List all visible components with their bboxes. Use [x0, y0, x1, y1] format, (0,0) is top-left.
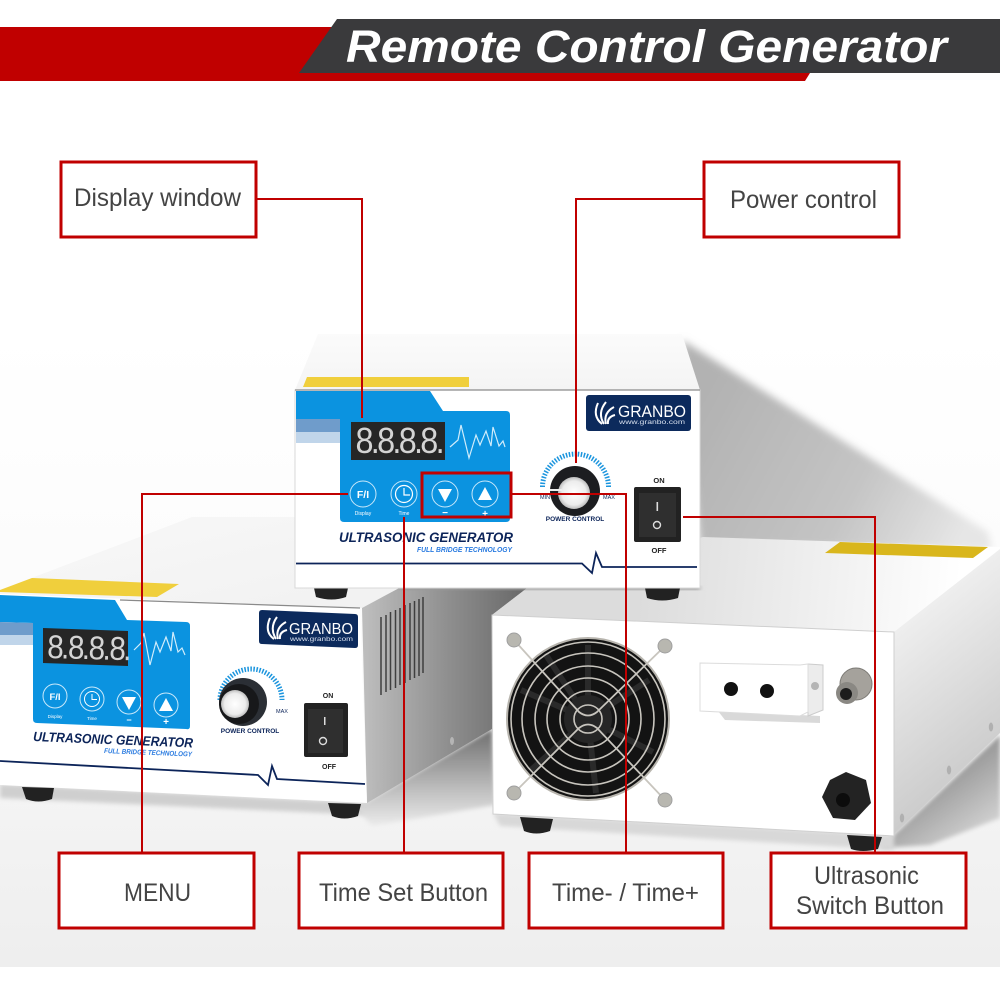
- tagline: FULL BRIDGE TECHNOLOGY: [104, 748, 193, 759]
- logo badge: www.granbo.com: [618, 419, 685, 426]
- yellow warning label: [303, 377, 469, 387]
- top face: [0, 517, 410, 608]
- top trim: [120, 600, 360, 608]
- fan blades: [521, 645, 653, 793]
- yellow warning label: [0, 578, 179, 597]
- button glyphs: Display: [355, 511, 372, 517]
- fan housing: [507, 638, 669, 800]
- button glyphs: Time: [399, 511, 410, 517]
- panel band: [296, 419, 340, 432]
- side vents: [381, 597, 423, 695]
- callout: menu: MENU: [124, 879, 191, 907]
- base line: [296, 553, 697, 573]
- button glyphs: F/I: [49, 692, 61, 703]
- aviation connector: [836, 668, 872, 704]
- left generator: [0, 517, 530, 826]
- logo badge: GRANBO: [618, 403, 686, 421]
- header banner: [0, 19, 1000, 81]
- callout: ultrasonic switch button: [771, 853, 966, 928]
- button glyphs: −: [126, 715, 132, 725]
- cooling fan: [507, 633, 672, 807]
- floor shadow under front: [0, 784, 367, 815]
- power switch: OFF: [322, 764, 337, 771]
- power knob: MAX: [276, 709, 288, 715]
- panel buttons: [350, 481, 498, 507]
- panel buttons: [43, 684, 178, 717]
- dark title plate: [299, 19, 1000, 73]
- title: Remote Control Generator: [346, 21, 949, 72]
- top trim: [295, 389, 700, 391]
- logo badge: GRANBO: [289, 621, 353, 638]
- leader: ultrasonic switch: [683, 517, 875, 853]
- bracket flap: [808, 664, 823, 716]
- power knob: POWER CONTROL: [221, 728, 279, 735]
- callout: power control: [704, 162, 899, 237]
- button glyphs: +: [482, 509, 488, 520]
- guard rings: [511, 642, 665, 796]
- fan screws: [507, 633, 672, 807]
- power switch: [634, 476, 681, 555]
- display digits: 8.8.8.8.: [47, 629, 132, 668]
- leader: power control: [576, 199, 704, 463]
- waveform: [134, 632, 185, 665]
- tagline: FULL BRIDGE TECHNOLOGY: [417, 545, 513, 554]
- panel band light: [296, 432, 340, 443]
- floor shadow under side: [356, 729, 495, 826]
- wall shadow of top unit: [682, 340, 992, 550]
- foot left: [520, 817, 553, 834]
- side face: [893, 549, 1000, 835]
- logo badge: [586, 395, 691, 431]
- logo badge: [259, 610, 358, 648]
- power knob: MIN: [540, 495, 550, 501]
- top face: [295, 334, 700, 390]
- panel band: [0, 622, 33, 635]
- floor shadow under back panel: [493, 813, 894, 850]
- front face: [0, 594, 367, 803]
- power knob: [540, 454, 615, 523]
- back panel: [492, 615, 894, 836]
- studio backdrop: [0, 330, 1000, 967]
- side screw: [377, 782, 381, 790]
- power knob: MAX: [603, 495, 615, 501]
- blue control panel: [0, 595, 190, 729]
- red stripe: [0, 27, 810, 81]
- callout: display window: [61, 162, 256, 237]
- foot right: [645, 588, 680, 600]
- button glyphs: [48, 692, 173, 728]
- waveform: [450, 425, 505, 458]
- product name: ULTRASONIC GENERATOR: [339, 530, 513, 545]
- callout: time minus plus: [529, 853, 723, 928]
- side screw far: [450, 737, 454, 745]
- power knob: [219, 669, 288, 735]
- guard cross: [514, 640, 665, 800]
- power switch: ON: [323, 693, 333, 700]
- display digits: 8.8.8.8.: [356, 421, 445, 461]
- floor shadow: [880, 735, 1000, 848]
- leader: time set: [403, 517, 405, 853]
- yellow warning label: [825, 542, 988, 558]
- button glyphs: Time: [87, 716, 97, 721]
- power switch: [304, 693, 348, 771]
- callout: time set button: [299, 853, 503, 928]
- bracket shadow: [718, 711, 820, 723]
- logo badge: www.granbo.com: [289, 636, 353, 643]
- callout: menu: [59, 853, 254, 928]
- power switch: OFF: [652, 546, 667, 555]
- cable gland: [822, 772, 871, 820]
- foot right: [847, 835, 882, 851]
- top face: [492, 537, 1000, 632]
- button glyphs: [355, 486, 492, 520]
- power switch: ON: [653, 476, 665, 485]
- leader: time minus plus: [511, 494, 626, 853]
- product name: ULTRASONIC GENERATOR: [33, 729, 194, 750]
- rear view generator: [492, 537, 1000, 851]
- front face: [295, 390, 700, 588]
- front generator: [295, 334, 700, 600]
- bracket screw: [811, 682, 819, 690]
- fan hub: [564, 695, 612, 743]
- leader: display window: [256, 199, 362, 418]
- blue control panel: [296, 391, 510, 522]
- foot left: [22, 787, 54, 802]
- base line: [0, 761, 365, 785]
- side face: [362, 586, 530, 803]
- button glyphs: −: [442, 508, 448, 519]
- display window: [351, 422, 445, 460]
- highlight: time buttons: [422, 473, 511, 517]
- foot right: [328, 803, 361, 818]
- button glyphs: F/I: [357, 489, 369, 501]
- side screws: [900, 722, 993, 822]
- callout: power control: Power control: [730, 186, 877, 214]
- shadow on units below: [400, 586, 700, 590]
- panel band light: [0, 635, 33, 645]
- button glyphs: Display: [48, 714, 63, 719]
- callout: time minus plus: Time- / Time+: [552, 879, 699, 907]
- display window: [43, 628, 128, 666]
- button glyphs: +: [163, 717, 169, 728]
- callout: time set button: Time Set Button: [319, 879, 488, 907]
- callout: ultrasonic switch button: Ultrasonic: [814, 862, 919, 890]
- callout: ultrasonic switch button: Switch Button: [796, 892, 944, 920]
- bracket holes: [724, 682, 774, 698]
- leader: menu: [142, 494, 348, 853]
- power knob: POWER CONTROL: [546, 516, 604, 523]
- callout: display window: Display window: [74, 184, 242, 212]
- output bracket: [700, 663, 808, 716]
- foot left: [314, 588, 348, 600]
